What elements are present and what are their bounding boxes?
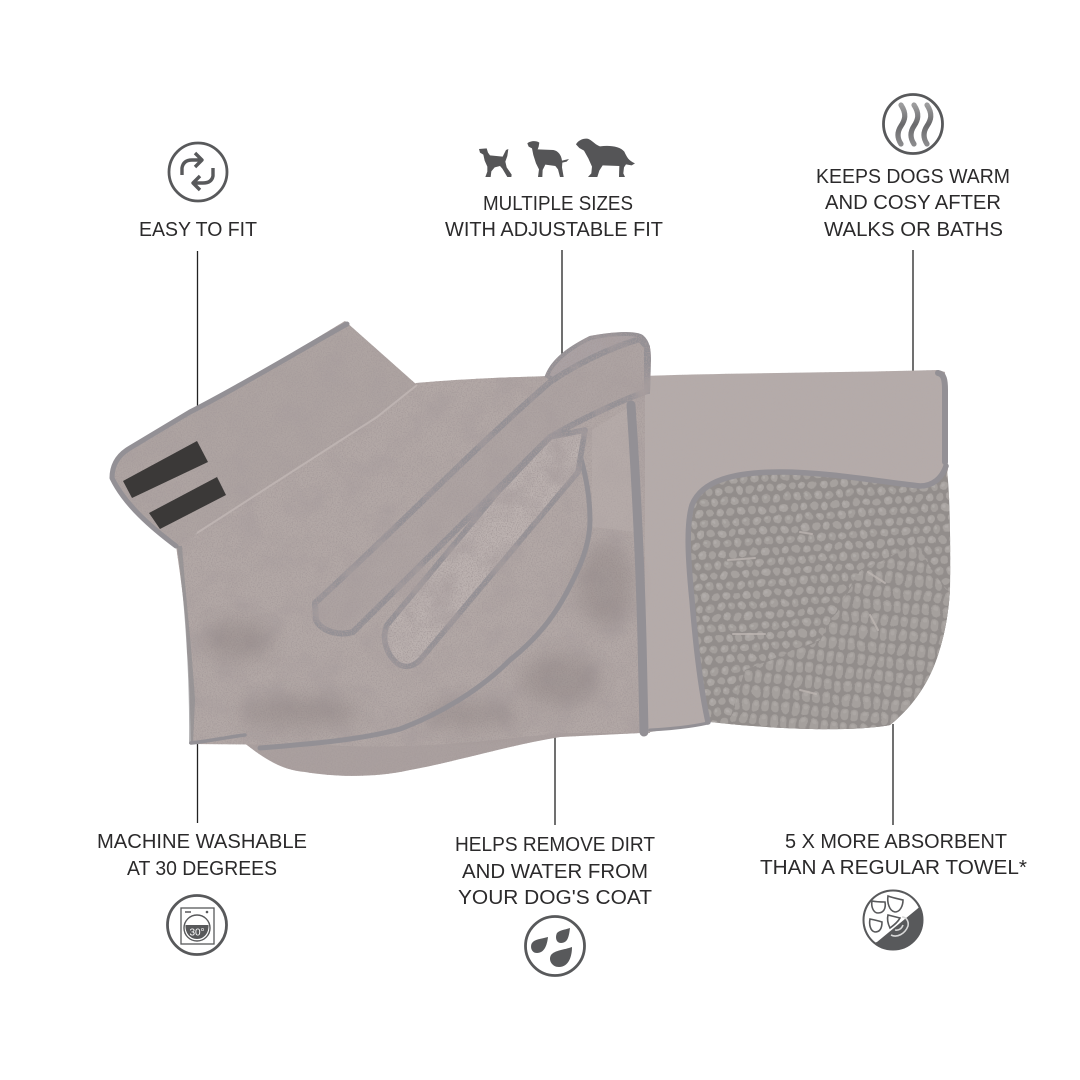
label: 5 x more absorbent: 5 X MORE ABSORBENT (785, 830, 1007, 853)
feature: easy to fit (139, 143, 257, 241)
leader line: machine washable (196, 742, 198, 823)
chenille top and left piping (688, 466, 946, 722)
leader line: absorbent (892, 724, 894, 825)
icon: three dog sizes (479, 139, 635, 177)
body left edge shading (177, 546, 195, 744)
velcro strip upper (123, 441, 208, 498)
icon: washing machine (168, 896, 226, 954)
coat main body (176, 374, 650, 747)
velcro strip lower (149, 477, 226, 529)
second strap (385, 430, 585, 666)
bottom hem piping (191, 735, 245, 743)
rear panel of coat (645, 370, 948, 733)
label: your dog's coat: YOUR DOG'S COAT (458, 886, 652, 909)
feature: machine washable (97, 830, 307, 954)
feature: helps remove dirt (455, 833, 655, 976)
first strap (315, 339, 647, 634)
feature: keeps dogs warm (816, 94, 1010, 241)
leader line: keeps dogs warm (912, 250, 914, 372)
chenille strands lower area (725, 545, 955, 735)
chenille panel (691, 471, 950, 730)
label: and water from: AND WATER FROM (462, 860, 648, 883)
feature: absorbent (760, 830, 1027, 950)
icon: water drops (526, 916, 584, 976)
label: easy to fit: EASY TO FIT (139, 218, 257, 241)
strap knot behind (547, 334, 649, 400)
label: at 30 degrees: AT 30 DEGREES (127, 857, 277, 880)
inner chest panel highlight (592, 405, 636, 532)
chenille light base streaks (728, 532, 885, 694)
label: helps remove dirt: HELPS REMOVE DIRT (455, 833, 655, 856)
label: and cosy after: AND COSY AFTER (825, 191, 1001, 214)
coat collar (112, 321, 417, 546)
label: machine washable: MACHINE WASHABLE (97, 830, 307, 853)
label: walks or baths: WALKS OR BATHS (824, 218, 1003, 241)
leader line: easy to fit (196, 251, 198, 410)
icon: rotating arrows (169, 143, 227, 201)
label: than a regular towel: THAN A REGULAR TOWEL* (760, 856, 1027, 879)
feature: multiple sizes (445, 139, 663, 241)
coat lower flap (243, 700, 640, 776)
dog coat product illustration (112, 321, 955, 776)
chest vertical piping (631, 405, 644, 732)
icon: absorbent drops and towel (862, 890, 924, 950)
label: multiple sizes: MULTIPLE SIZES (483, 192, 633, 215)
chenille base (691, 471, 950, 730)
collar seam (197, 385, 417, 533)
chenille strand texture (725, 545, 955, 735)
label: 30 degrees in drum: 30° (189, 928, 205, 938)
long curved front piping (260, 437, 590, 748)
body shadow patches (204, 357, 633, 728)
label: keeps dogs warm: KEEPS DOGS WARM (816, 165, 1010, 188)
chenille dots (691, 472, 950, 730)
icon: steam (884, 94, 942, 154)
label: with adjustable fit: WITH ADJUSTABLE FIT (445, 218, 663, 241)
collar piping (112, 324, 347, 546)
rear panel right piping (938, 373, 945, 462)
leader line: helps remove dirt (554, 735, 556, 825)
chenille bottom piping (650, 723, 708, 730)
leader line: multiple sizes (561, 250, 563, 356)
